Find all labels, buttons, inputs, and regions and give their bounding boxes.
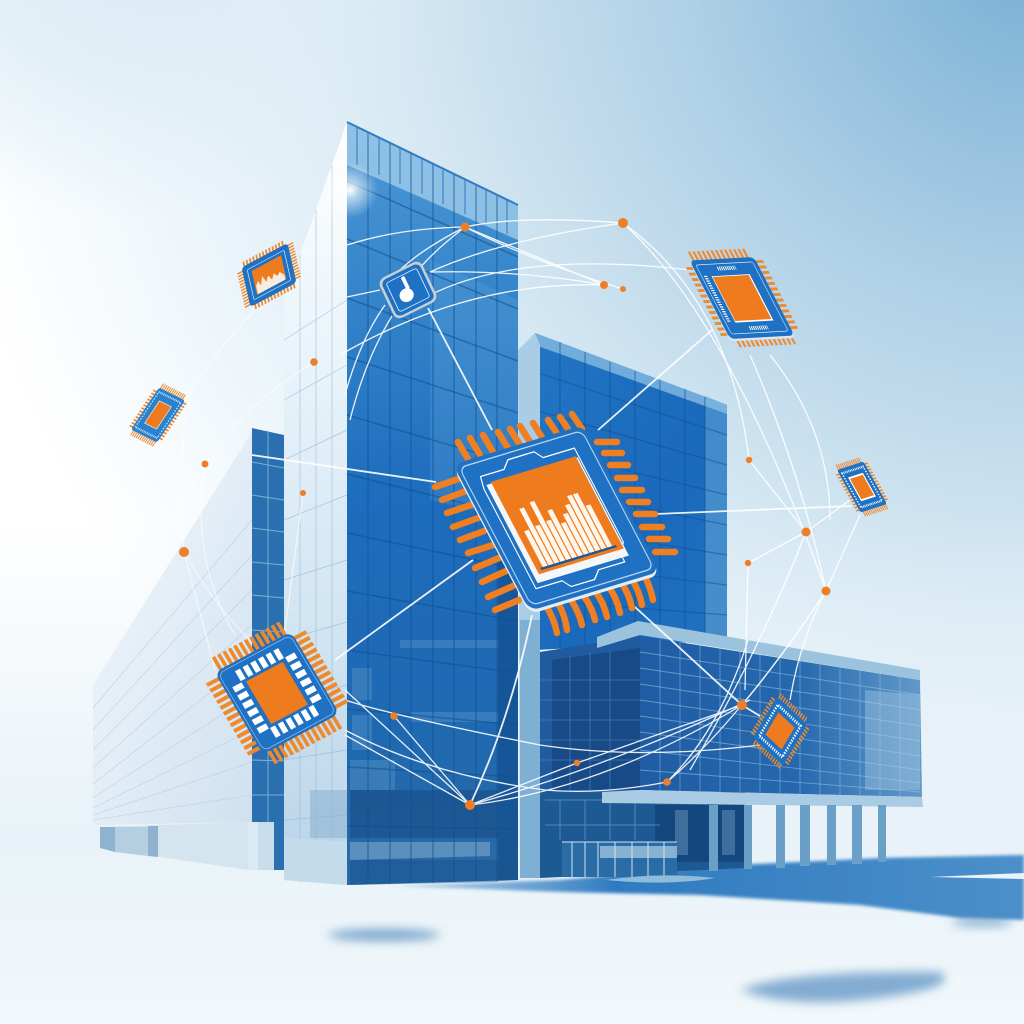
middle building (518, 333, 727, 878)
chip: right small (832, 456, 892, 518)
network lines (182, 220, 860, 805)
podium building (540, 621, 923, 883)
floating shadow: right (740, 972, 945, 1002)
icon: wrench (392, 275, 416, 304)
columns (709, 805, 886, 871)
floating shadow: left (328, 929, 440, 941)
light streak on shadow (930, 873, 1024, 879)
lens flare (322, 162, 378, 218)
chip: lower left with pad ring (196, 613, 358, 773)
chip pins (435, 414, 675, 633)
glass entrance (562, 842, 715, 883)
podium lower floor (540, 792, 745, 878)
network nodes (179, 218, 830, 810)
bar chart on chip (512, 487, 613, 568)
podium roof (597, 621, 920, 680)
ground plane (0, 838, 1024, 1024)
white pillar (518, 333, 540, 878)
ground shadow of the building (395, 855, 1024, 920)
chip: top left with chart (235, 236, 303, 314)
floating shadow: far right (952, 918, 1012, 926)
central tower (284, 122, 518, 885)
chip: lower right (747, 689, 813, 773)
chip: left small (125, 381, 191, 449)
chip: central with bar chart (435, 414, 675, 633)
left low building (93, 428, 284, 870)
chip: top right (678, 248, 806, 348)
chip: icon with wrench (377, 259, 439, 321)
podium slab (602, 790, 923, 807)
